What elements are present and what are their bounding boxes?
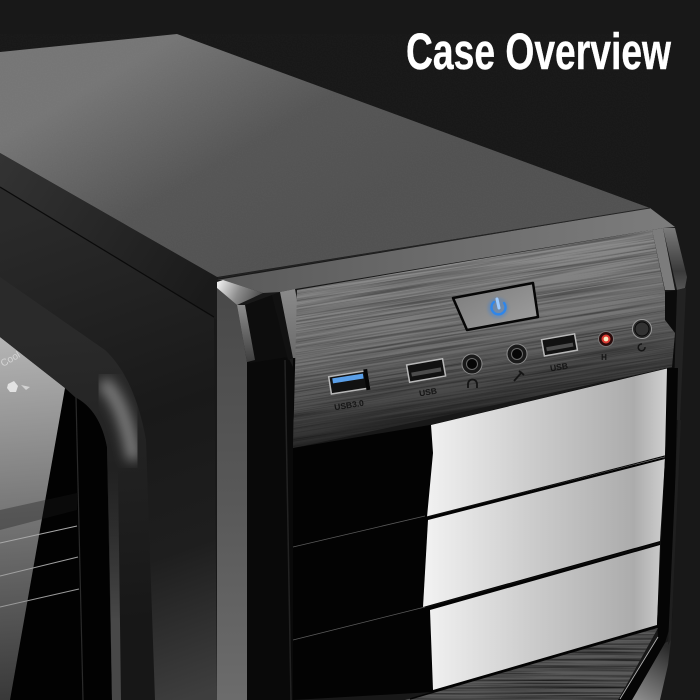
port: microphone jack — [507, 344, 527, 364]
power button — [453, 283, 538, 330]
right corner trim — [652, 228, 687, 420]
reset button — [632, 320, 652, 338]
drive bay highlight 3 — [430, 545, 660, 690]
top edge bevel — [0, 153, 217, 320]
front top bevel band — [217, 208, 675, 293]
front left pillar — [217, 288, 293, 700]
gray corner strip — [237, 305, 255, 362]
right frame — [618, 368, 681, 700]
black seam beside trim — [272, 292, 293, 360]
drive bay highlight 1 — [427, 368, 669, 517]
port: USB left — [406, 358, 446, 383]
port: headphone jack — [462, 354, 482, 374]
icon: reset — [638, 344, 645, 351]
side window glass — [0, 337, 112, 700]
port: USB 3.0 — [328, 369, 370, 396]
icon: power symbol — [488, 298, 508, 318]
label: H: H — [601, 353, 607, 362]
indicator: red HDD LED — [598, 332, 614, 346]
icon: headphone — [468, 380, 477, 388]
bright corner wedge — [217, 280, 263, 305]
brushed metal control panel — [293, 230, 675, 448]
case top surface — [0, 34, 650, 277]
gray trim left of front panel — [280, 289, 308, 420]
port: USB right — [541, 333, 578, 357]
label: USB right: USB — [549, 361, 569, 373]
side panel — [0, 153, 217, 700]
window frame — [0, 320, 155, 700]
label: USB3.0: USB3.0 — [334, 398, 365, 412]
label: USB: USB — [418, 386, 438, 398]
lower brushed panel — [400, 625, 662, 700]
glossy drive bay panels — [293, 368, 669, 700]
icon: microphone — [514, 371, 524, 381]
black corner block — [245, 295, 288, 363]
drive bay highlight 2 — [423, 459, 665, 607]
window reflected icon — [7, 381, 18, 392]
